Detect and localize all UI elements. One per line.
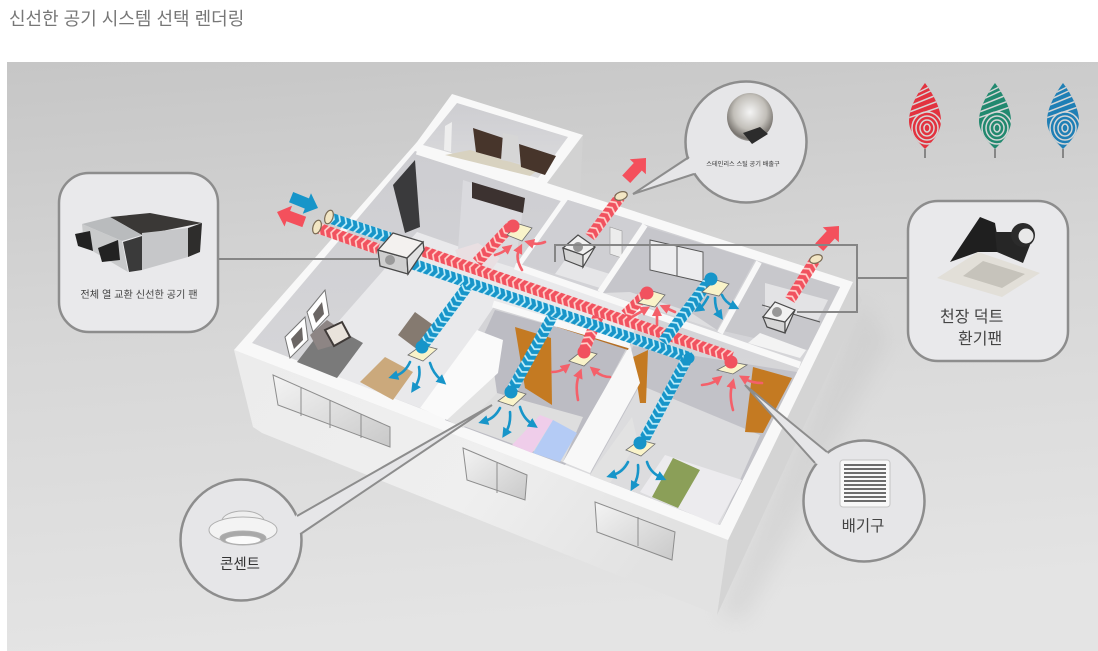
ground shadow <box>717 300 890 620</box>
annex kitchen room <box>423 103 568 178</box>
duct end caps <box>311 190 823 265</box>
panel: heat exchange fan <box>59 173 218 332</box>
corridor door band <box>557 320 632 350</box>
icon: steel vent dome <box>727 93 773 144</box>
icon: heat exchange unit <box>75 213 202 272</box>
bath fan box two <box>763 302 795 333</box>
callout: exhaust grille <box>745 385 924 562</box>
main heat exchange box <box>378 233 424 274</box>
picture frames <box>285 290 329 358</box>
label: ceiling duct fan: 천장 덕트 <box>940 308 1003 326</box>
arrow: fresh air in <box>287 187 322 218</box>
title: 신선한 공기 시스템 선택 렌더링 <box>9 9 244 29</box>
front wall windows <box>273 375 675 560</box>
living floor <box>302 232 640 408</box>
bath fan box one <box>563 235 595 267</box>
icon: ceiling fan <box>937 217 1040 297</box>
room B partition <box>563 345 640 473</box>
label: exhaust grille: 배기구 <box>842 517 884 535</box>
house illustration <box>234 94 890 620</box>
arrow: bath two exhaust <box>811 218 847 255</box>
arrow: bath one exhaust <box>618 150 654 187</box>
exterior right wall <box>717 282 862 615</box>
label: ceiling duct fan: 환기팬 <box>958 330 1002 348</box>
main interior <box>252 151 840 525</box>
callout: supply diffuser <box>180 405 492 600</box>
roof footprint <box>234 94 853 540</box>
connector lines <box>218 245 908 312</box>
exterior front wall <box>234 350 728 615</box>
blue ducts <box>328 213 715 450</box>
room B <box>590 346 797 525</box>
airflow arrows <box>395 242 762 485</box>
callout: stainless air outlet <box>633 82 806 202</box>
label: heat exchange fan: 전체 열 교환 신선한 공기 팬 <box>80 289 198 301</box>
room A <box>420 310 627 465</box>
dark door <box>393 160 420 233</box>
bathroom rooms <box>520 200 840 358</box>
ventilation ducts <box>311 190 823 456</box>
ceiling vents <box>408 224 747 456</box>
icon: green fingerprint leaf <box>975 83 1013 158</box>
duct round ends <box>416 220 738 450</box>
icon: red fingerprint leaf <box>905 83 943 158</box>
blue supply arrows <box>395 295 733 485</box>
armchair <box>398 312 440 353</box>
bedding <box>455 243 500 278</box>
label: supply diffuser: 콘센트 <box>220 556 260 573</box>
panel: ceiling duct fan <box>908 201 1068 361</box>
icon: grille <box>840 460 890 507</box>
coffee table <box>360 357 413 400</box>
interior partitions <box>417 151 800 365</box>
annex side wall <box>547 135 583 195</box>
label: stainless air outlet: 스테인리스 스틸 공기 배출구 <box>706 160 780 168</box>
red ducts <box>316 194 820 362</box>
red return arrows <box>495 242 762 410</box>
icon: blue fingerprint leaf <box>1043 83 1081 158</box>
sofa and rug <box>297 320 363 378</box>
arrow: exhaust out <box>273 202 308 232</box>
big outdoor air arrows <box>273 150 847 255</box>
kitchen niche <box>458 180 525 268</box>
icon: round diffuser <box>209 511 277 545</box>
